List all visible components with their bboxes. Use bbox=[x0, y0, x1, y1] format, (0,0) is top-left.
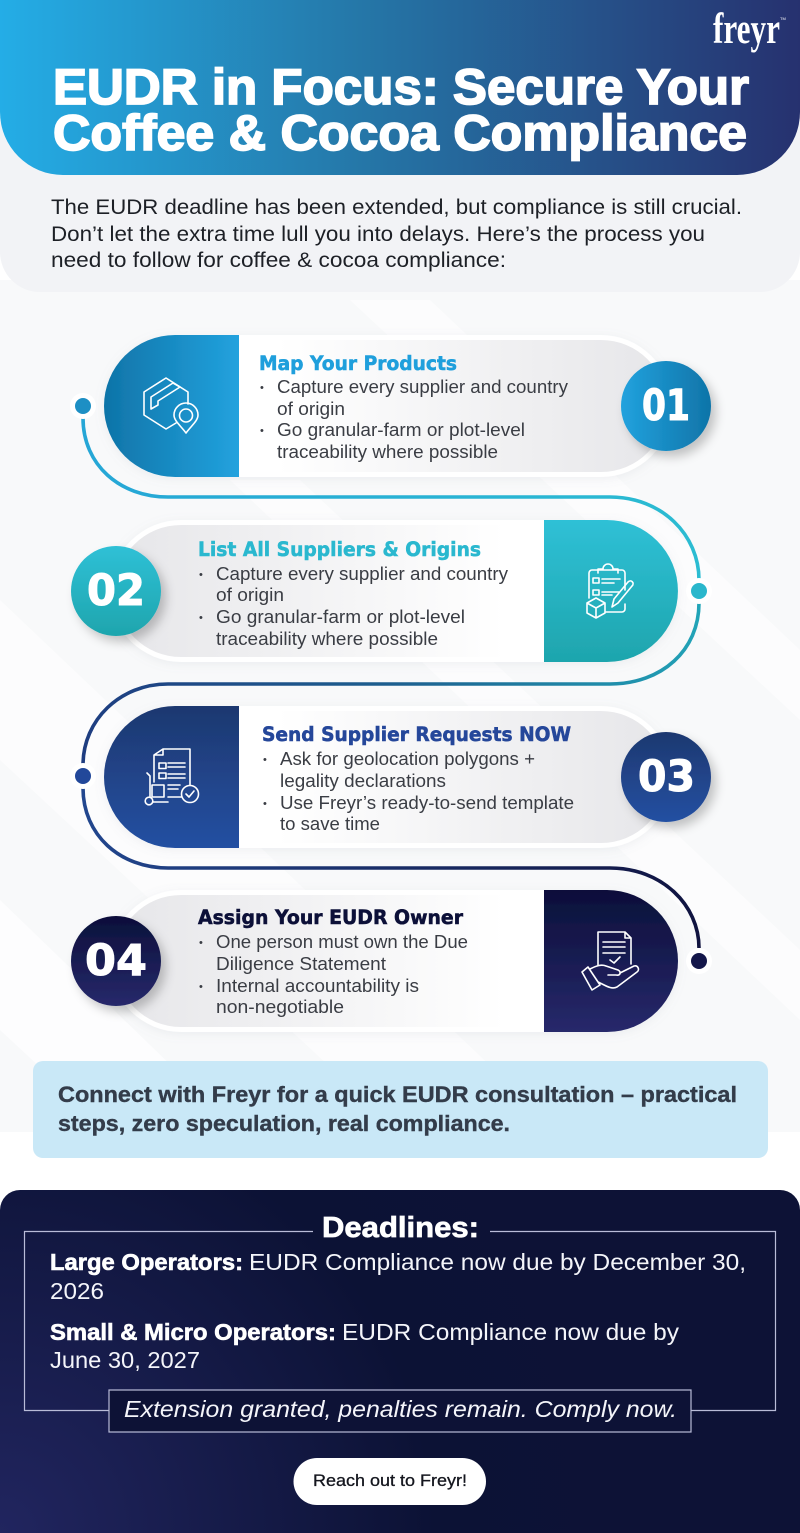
panel: deadlines bbox=[0, 1190, 800, 1533]
step 4 card bbox=[110, 890, 678, 1032]
step 1 number bbox=[621, 361, 711, 451]
step 3 number: 03 bbox=[638, 752, 695, 802]
icon: box with location pin bbox=[144, 378, 198, 433]
icon: clipboard with cube and pencil bbox=[587, 564, 633, 618]
step 3 bullets: legality declarations bbox=[280, 771, 446, 791]
connector dot 2 bbox=[686, 578, 712, 604]
callout: consultation bbox=[33, 1061, 768, 1158]
step 1 bullets bbox=[260, 377, 568, 462]
callout: consultation: Connect with Freyr for a quick EUDR consultation – practical bbox=[58, 1082, 737, 1107]
connector dot 4 bbox=[686, 948, 712, 974]
extension note bbox=[109, 1390, 691, 1432]
step 3 bullets: • bbox=[263, 754, 267, 766]
step 4 bullets: Diligence Statement bbox=[216, 954, 386, 974]
step 4 bullets: One person must own the Due bbox=[216, 932, 468, 952]
text: intro paragraph: The EUDR deadline has been extended, but compliance is still crucial. bbox=[51, 195, 742, 219]
background: process section bbox=[0, 280, 800, 1132]
step 2 bullets: of origin bbox=[216, 585, 284, 605]
step 4 bullets bbox=[199, 932, 468, 1017]
step 2 bullets: • bbox=[199, 612, 203, 624]
deadlines heading: Deadlines: bbox=[322, 1212, 479, 1244]
icon: hand holding document bbox=[582, 932, 638, 990]
step 3 heading: Send Supplier Requests NOW bbox=[262, 723, 571, 746]
large operators deadline: EUDR Compliance now due by December 30, bbox=[249, 1249, 746, 1275]
large operators deadline: 2026 bbox=[50, 1278, 104, 1304]
step 1 bullets: traceability where possible bbox=[277, 442, 498, 462]
step 4 bullets: • bbox=[199, 937, 203, 949]
small and micro operators deadline: June 30, 2027 bbox=[50, 1347, 200, 1373]
button: reach out: Reach out to Freyr! bbox=[313, 1471, 467, 1490]
step 1 bbox=[70, 335, 711, 477]
connector path bbox=[83, 418, 699, 948]
small and micro operators deadline bbox=[50, 1319, 680, 1373]
step 3 bbox=[70, 706, 711, 848]
step 1 card bbox=[104, 335, 672, 477]
step 1 bullets: • bbox=[260, 382, 264, 394]
step 4 heading: Assign Your EUDR Owner bbox=[198, 906, 463, 929]
text: intro paragraph: Don’t let the extra time lull you into delays. Here’s the process you bbox=[51, 222, 705, 246]
step 1 number: 01 bbox=[642, 381, 690, 431]
step 4 number: 04 bbox=[85, 936, 147, 986]
step 3 bullets: Ask for geolocation polygons + bbox=[280, 749, 535, 769]
icon: checklist with trolley bbox=[145, 749, 198, 805]
step 3 card bbox=[104, 706, 672, 848]
small and micro operators deadline: EUDR Compliance now due by bbox=[342, 1319, 680, 1345]
callout: consultation: steps, zero speculation, real compliance. bbox=[58, 1111, 510, 1136]
step 4 bullets: non-negotiable bbox=[216, 997, 344, 1017]
step 2 bullets: Go granular-farm or plot-level bbox=[216, 607, 465, 627]
connector dot 3 bbox=[70, 763, 96, 789]
step 2 card bbox=[110, 520, 678, 662]
text: intro paragraph: need to follow for coffee & cocoa compliance: bbox=[51, 248, 506, 272]
step 2 heading: List All Suppliers & Origins bbox=[198, 538, 481, 561]
title bbox=[53, 59, 749, 161]
small and micro operators deadline: Small & Micro Operators: bbox=[50, 1319, 336, 1345]
connector dot 1 bbox=[70, 393, 96, 419]
logo: freyr: TM bbox=[780, 16, 786, 21]
step 2 bbox=[71, 520, 712, 662]
step 3 bullets: • bbox=[263, 798, 267, 810]
deadlines frame bbox=[24, 1232, 776, 1410]
header banner bbox=[0, 0, 800, 175]
button: reach out bbox=[294, 1458, 486, 1505]
step 1 bullets: Go granular-farm or plot-level bbox=[277, 420, 525, 440]
step 2 bullets bbox=[199, 564, 508, 649]
step 4 bbox=[71, 890, 712, 1032]
step 1 bullets: • bbox=[260, 425, 264, 437]
step 3 number bbox=[621, 732, 711, 822]
step 3 bullets: Use Freyr’s ready-to-send template bbox=[280, 793, 574, 813]
step 2 bullets: Capture every supplier and country bbox=[216, 564, 508, 584]
large operators deadline: Large Operators: bbox=[50, 1249, 243, 1275]
step 4 bullets: • bbox=[199, 981, 203, 993]
step 1 bullets: Capture every supplier and country bbox=[277, 377, 568, 397]
step 3 bullets: to save time bbox=[280, 814, 380, 834]
title: Coffee & Cocoa Compliance bbox=[53, 105, 747, 161]
step 4 bullets: Internal accountability is bbox=[216, 976, 419, 996]
step 2 bullets: • bbox=[199, 569, 203, 581]
step 3 bullets bbox=[263, 749, 574, 834]
title: EUDR in Focus: Secure Your bbox=[53, 59, 749, 115]
step 2 number: 02 bbox=[87, 566, 145, 616]
step 1 heading: Map Your Products bbox=[259, 352, 457, 375]
panel: intro bbox=[0, 120, 800, 292]
large operators deadline bbox=[50, 1249, 746, 1304]
step 1 bullets: of origin bbox=[277, 399, 345, 419]
step 2 bullets: traceability where possible bbox=[216, 629, 438, 649]
step 2 number bbox=[71, 546, 161, 636]
extension note: Extension granted, penalties remain. Comply now. bbox=[124, 1396, 677, 1422]
text: intro paragraph bbox=[51, 195, 742, 272]
step 4 number bbox=[71, 916, 161, 1006]
